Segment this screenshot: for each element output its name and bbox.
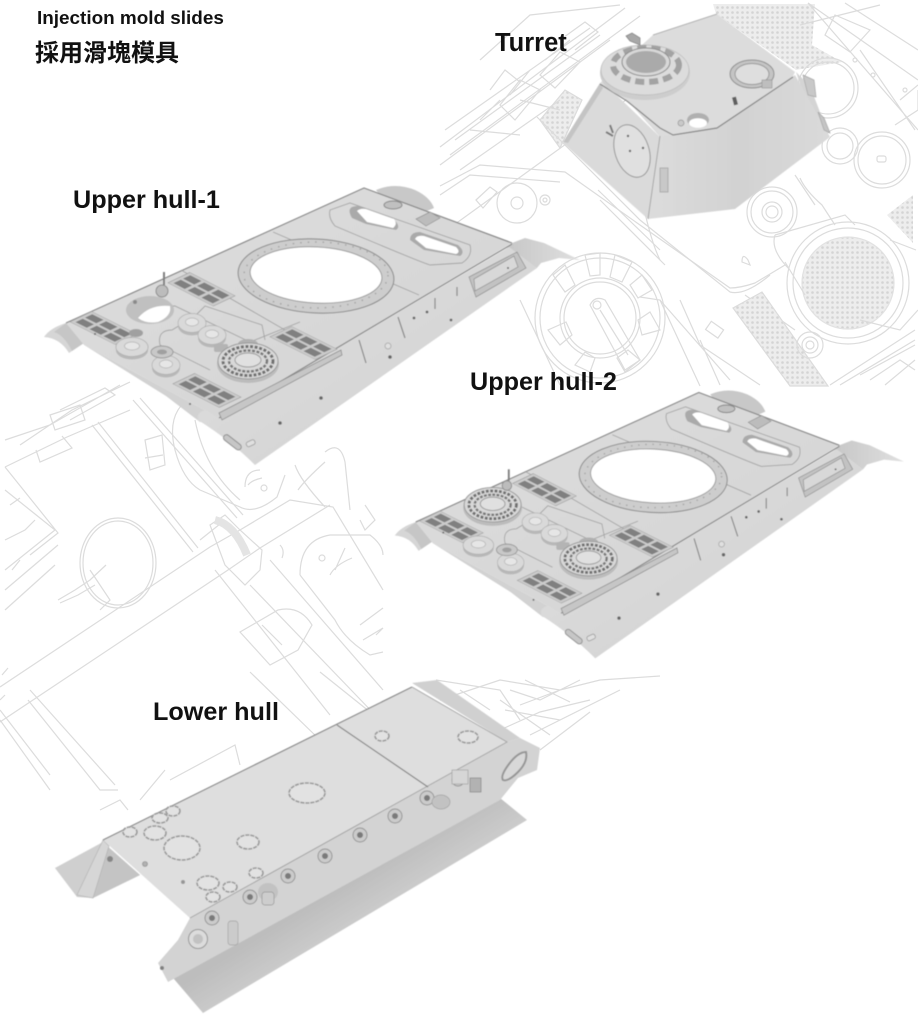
blueprint line art: upper right: [300, 3, 918, 386]
blueprint line art: left middle: [0, 382, 383, 722]
title: Chinese heading: 採用滑塊模具: [35, 40, 179, 67]
label: Upper hull-2: Upper hull-2: [470, 368, 617, 396]
second turbine grille: [463, 469, 522, 526]
base plate: [168, 798, 527, 1013]
deck: [103, 687, 507, 918]
deck discs: [123, 731, 478, 902]
side fittings: [160, 770, 481, 970]
upper hull 1 model: [44, 186, 580, 465]
upper hull 2 model: [395, 391, 904, 658]
sprocket teardrop: [502, 752, 526, 780]
turret opening: [678, 113, 709, 128]
suspension sockets: [205, 774, 464, 925]
turret roof port: [730, 60, 774, 88]
turret cupola: [600, 33, 690, 100]
turret model: [563, 14, 830, 219]
rear left plate: [55, 842, 140, 898]
label: Upper hull-1: Upper hull-1: [73, 186, 220, 214]
turret side hatch: [606, 120, 657, 182]
hatch with opening: [126, 272, 174, 337]
title: Injection mold slides: Injection mold slides: [37, 8, 224, 29]
lower hull model: [55, 680, 540, 1013]
label: Lower hull: Lower hull: [153, 698, 279, 726]
blueprint line art: behind lower hull: [0, 672, 660, 810]
label: Turret: Turret: [495, 29, 567, 57]
side wall: [158, 738, 540, 982]
